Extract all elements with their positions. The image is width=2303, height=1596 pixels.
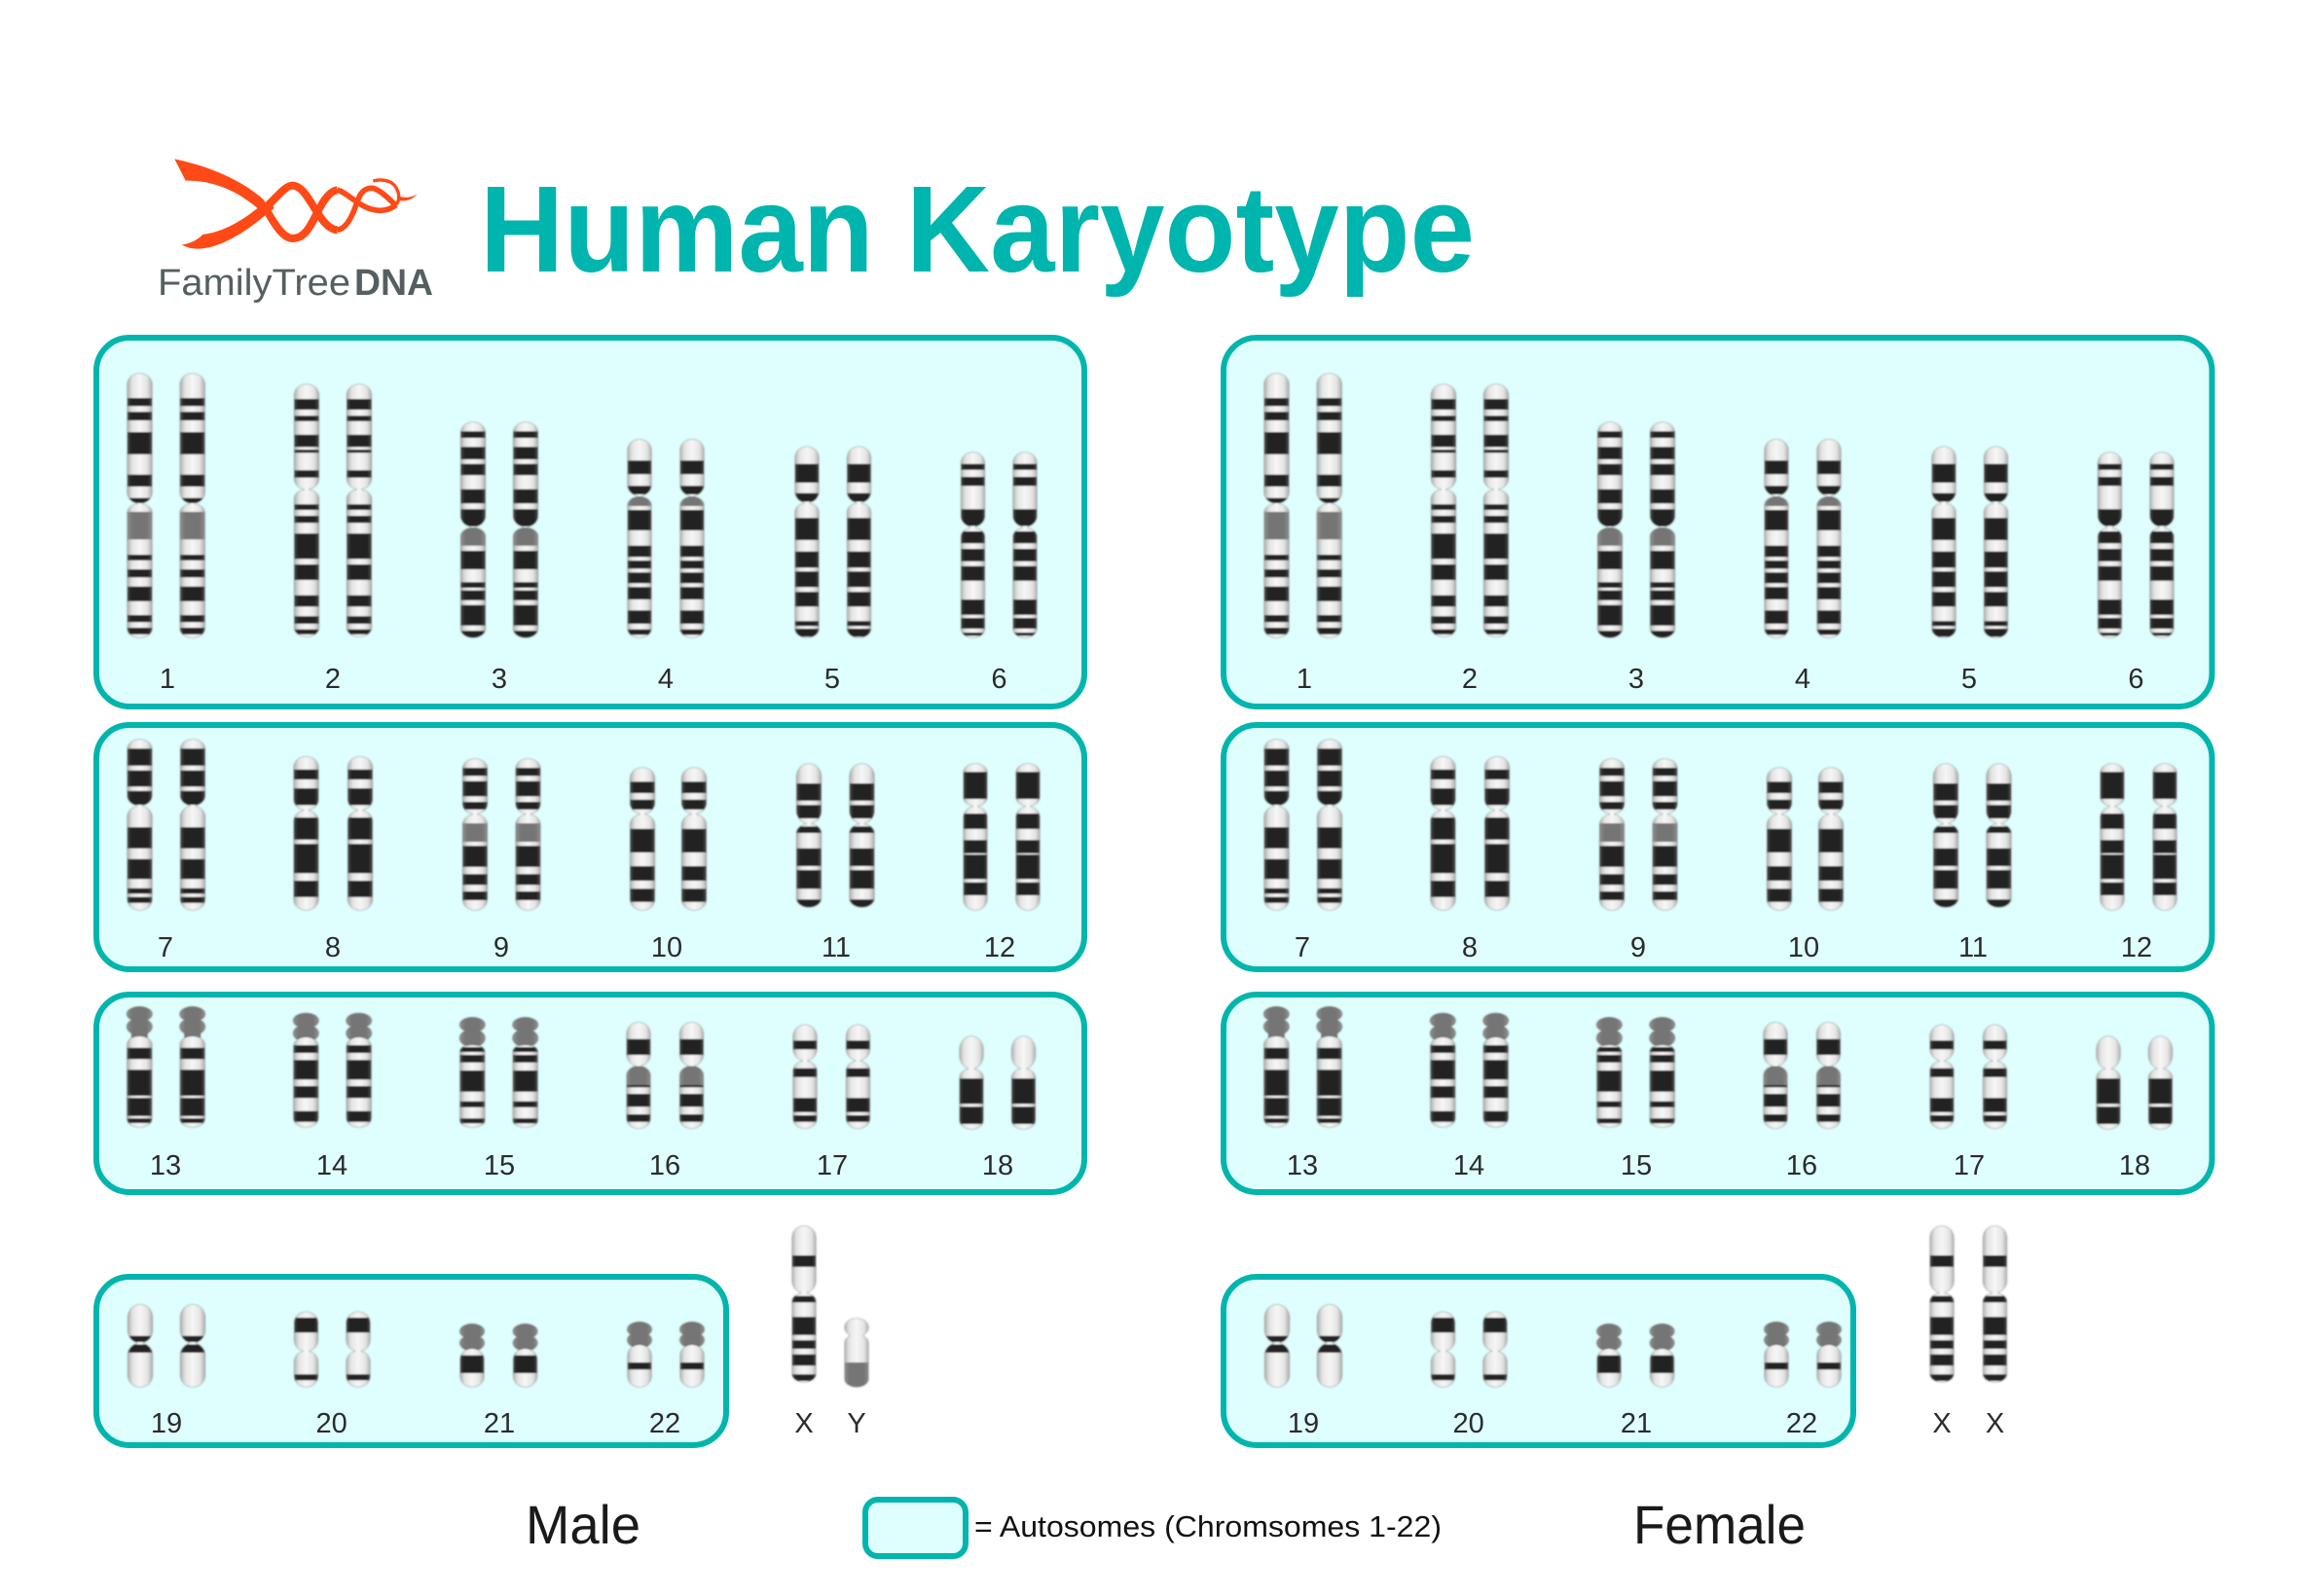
pair: chromosome 18: 18 bbox=[2119, 1150, 2150, 1181]
panel: female chromosomes 1-6 bbox=[1224, 338, 2212, 707]
pair: chromosome 6: 6 bbox=[2128, 664, 2144, 695]
pair: chromosome 20: 20 bbox=[1452, 1408, 1484, 1439]
pair: chromosome 5 bbox=[794, 447, 872, 695]
pair: chromosome 18 bbox=[959, 1036, 1036, 1181]
legend swatch bbox=[865, 1500, 966, 1556]
pair: chromosome 12: 12 bbox=[2121, 932, 2152, 963]
pair: chromosome 16: 16 bbox=[649, 1150, 680, 1181]
pair: chromosome 13 bbox=[1263, 1006, 1342, 1181]
panel: female chromosomes 19-22 bbox=[1224, 1277, 1853, 1445]
pair: chromosome 4 bbox=[1764, 439, 1842, 695]
pair: chromosome 6: 6 bbox=[991, 664, 1007, 695]
female sex chromosomes X and X: X bbox=[1986, 1408, 2004, 1439]
pair: chromosome 13: 13 bbox=[150, 1150, 181, 1181]
pair: chromosome 9: 9 bbox=[1630, 932, 1646, 963]
pair: chromosome 1: 1 bbox=[1297, 664, 1312, 695]
pair: chromosome 18: 18 bbox=[982, 1150, 1013, 1181]
pair: chromosome 22: 22 bbox=[649, 1408, 680, 1439]
pair: chromosome 2 bbox=[1431, 384, 1509, 695]
pair: chromosome 9 bbox=[1599, 759, 1678, 963]
pair: chromosome 6 bbox=[2097, 453, 2175, 695]
pair: chromosome 4: 4 bbox=[658, 664, 674, 695]
pair: chromosome 12: 12 bbox=[984, 932, 1015, 963]
pair: chromosome 19 bbox=[128, 1304, 205, 1439]
pair: chromosome 21 bbox=[459, 1324, 538, 1439]
title: Human Karyotype bbox=[480, 161, 1475, 298]
panel: male chromosomes 7-12 bbox=[96, 725, 1084, 969]
pair: chromosome 8 bbox=[1431, 756, 1510, 963]
panel: female chromosomes 13-18 bbox=[1224, 995, 2212, 1192]
pair: chromosome 13 bbox=[127, 1006, 205, 1181]
pair: chromosome 14: 14 bbox=[316, 1150, 347, 1181]
panel: male chromosomes 19-22 bbox=[96, 1277, 726, 1445]
pair: chromosome 20: 20 bbox=[315, 1408, 347, 1439]
pair: chromosome 11: 11 bbox=[1958, 932, 1988, 963]
pair: chromosome 17: 17 bbox=[1954, 1150, 1985, 1181]
pair: chromosome 22 bbox=[1764, 1322, 1842, 1439]
female sex chromosomes X and X bbox=[1929, 1226, 2007, 1439]
pair: chromosome 15: 15 bbox=[484, 1150, 515, 1181]
pair: chromosome 7: 7 bbox=[1295, 932, 1310, 963]
pair: chromosome 11 bbox=[796, 764, 874, 963]
pair: chromosome 20 bbox=[1431, 1312, 1508, 1439]
pair: chromosome 8: 8 bbox=[1462, 932, 1478, 963]
male sex chromosomes X and Y bbox=[791, 1226, 869, 1439]
pair: chromosome 17 bbox=[792, 1025, 870, 1181]
legend: autosomes bbox=[865, 1500, 1442, 1556]
pair: chromosome 8 bbox=[294, 756, 373, 963]
pair: chromosome 16: 16 bbox=[1786, 1150, 1817, 1181]
pair: chromosome 4 bbox=[627, 439, 705, 695]
pair: chromosome 10 bbox=[1767, 768, 1844, 963]
panel: male chromosomes 13-18 bbox=[96, 995, 1084, 1192]
pair: chromosome 11: 11 bbox=[822, 932, 851, 963]
pair: chromosome 14 bbox=[1430, 1013, 1509, 1181]
heading: Female: Female bbox=[1633, 1494, 1806, 1555]
male sex chromosomes X and Y: Y bbox=[847, 1408, 866, 1439]
pair: chromosome 5: 5 bbox=[824, 664, 840, 695]
pair: chromosome 21: 21 bbox=[1621, 1408, 1652, 1439]
pair: chromosome 16 bbox=[626, 1022, 705, 1181]
pair: chromosome 14 bbox=[293, 1013, 372, 1181]
pair: chromosome 17: 17 bbox=[817, 1150, 848, 1181]
pair: chromosome 10: 10 bbox=[1788, 932, 1819, 963]
pair: chromosome 1: 1 bbox=[160, 664, 175, 695]
pair: chromosome 8: 8 bbox=[325, 932, 341, 963]
pair: chromosome 12 bbox=[963, 764, 1041, 963]
female sex chromosomes X and X: X bbox=[1932, 1408, 1952, 1439]
pair: chromosome 10: 10 bbox=[651, 932, 682, 963]
pair: chromosome 22: 22 bbox=[1786, 1408, 1817, 1439]
pair: chromosome 11 bbox=[1933, 764, 2011, 963]
pair: chromosome 15 bbox=[1596, 1018, 1675, 1181]
panel: female chromosomes 7-12 bbox=[1224, 725, 2212, 969]
pair: chromosome 19 bbox=[1264, 1304, 1342, 1439]
pair: chromosome 18 bbox=[2096, 1036, 2173, 1181]
pair: chromosome 9 bbox=[462, 759, 541, 963]
panel: male chromosomes 1-6 bbox=[96, 338, 1084, 707]
logo: FamilyTreeDNA bbox=[158, 159, 433, 304]
pair: chromosome 3: 3 bbox=[492, 664, 507, 695]
pair: chromosome 13: 13 bbox=[1287, 1150, 1318, 1181]
pair: chromosome 3 bbox=[460, 422, 538, 695]
pair: chromosome 6 bbox=[960, 453, 1038, 695]
pair: chromosome 20 bbox=[294, 1312, 371, 1439]
pair: chromosome 17 bbox=[1929, 1025, 2007, 1181]
pair: chromosome 15: 15 bbox=[1621, 1150, 1652, 1181]
logo wordmark: FamilyTree bbox=[158, 263, 350, 304]
legend text: = Autosomes (Chromsomes 1-22) bbox=[974, 1509, 1442, 1543]
pair: chromosome 14: 14 bbox=[1453, 1150, 1484, 1181]
pair: chromosome 22 bbox=[627, 1322, 705, 1439]
pair: chromosome 1 bbox=[127, 374, 205, 695]
heading: Male: Male bbox=[526, 1494, 640, 1555]
pair: chromosome 15 bbox=[459, 1018, 538, 1181]
pair: chromosome 3: 3 bbox=[1628, 664, 1644, 695]
icon: DNA helix bbox=[174, 159, 418, 249]
pair: chromosome 21 bbox=[1596, 1324, 1675, 1439]
pair: chromosome 9: 9 bbox=[494, 932, 509, 963]
pair: chromosome 19: 19 bbox=[1288, 1408, 1319, 1439]
pair: chromosome 3 bbox=[1597, 422, 1675, 695]
pair: chromosome 2: 2 bbox=[1462, 664, 1478, 695]
pair: chromosome 5 bbox=[1931, 447, 2009, 695]
pair: chromosome 7 bbox=[127, 740, 205, 963]
pair: chromosome 19: 19 bbox=[151, 1408, 182, 1439]
pair: chromosome 4: 4 bbox=[1795, 664, 1810, 695]
male sex chromosomes X and Y: X bbox=[794, 1408, 814, 1439]
pair: chromosome 7 bbox=[1263, 740, 1342, 963]
pair: chromosome 5: 5 bbox=[1961, 664, 1977, 695]
pair: chromosome 1 bbox=[1263, 374, 1342, 695]
pair: chromosome 2 bbox=[294, 384, 372, 695]
pair: chromosome 21: 21 bbox=[484, 1408, 515, 1439]
pair: chromosome 12 bbox=[2100, 764, 2177, 963]
pair: chromosome 7: 7 bbox=[158, 932, 173, 963]
pair: chromosome 16 bbox=[1763, 1022, 1842, 1181]
pair: chromosome 2: 2 bbox=[325, 664, 341, 695]
pair: chromosome 10 bbox=[630, 768, 707, 963]
logo wordmark: DNA bbox=[354, 263, 433, 304]
